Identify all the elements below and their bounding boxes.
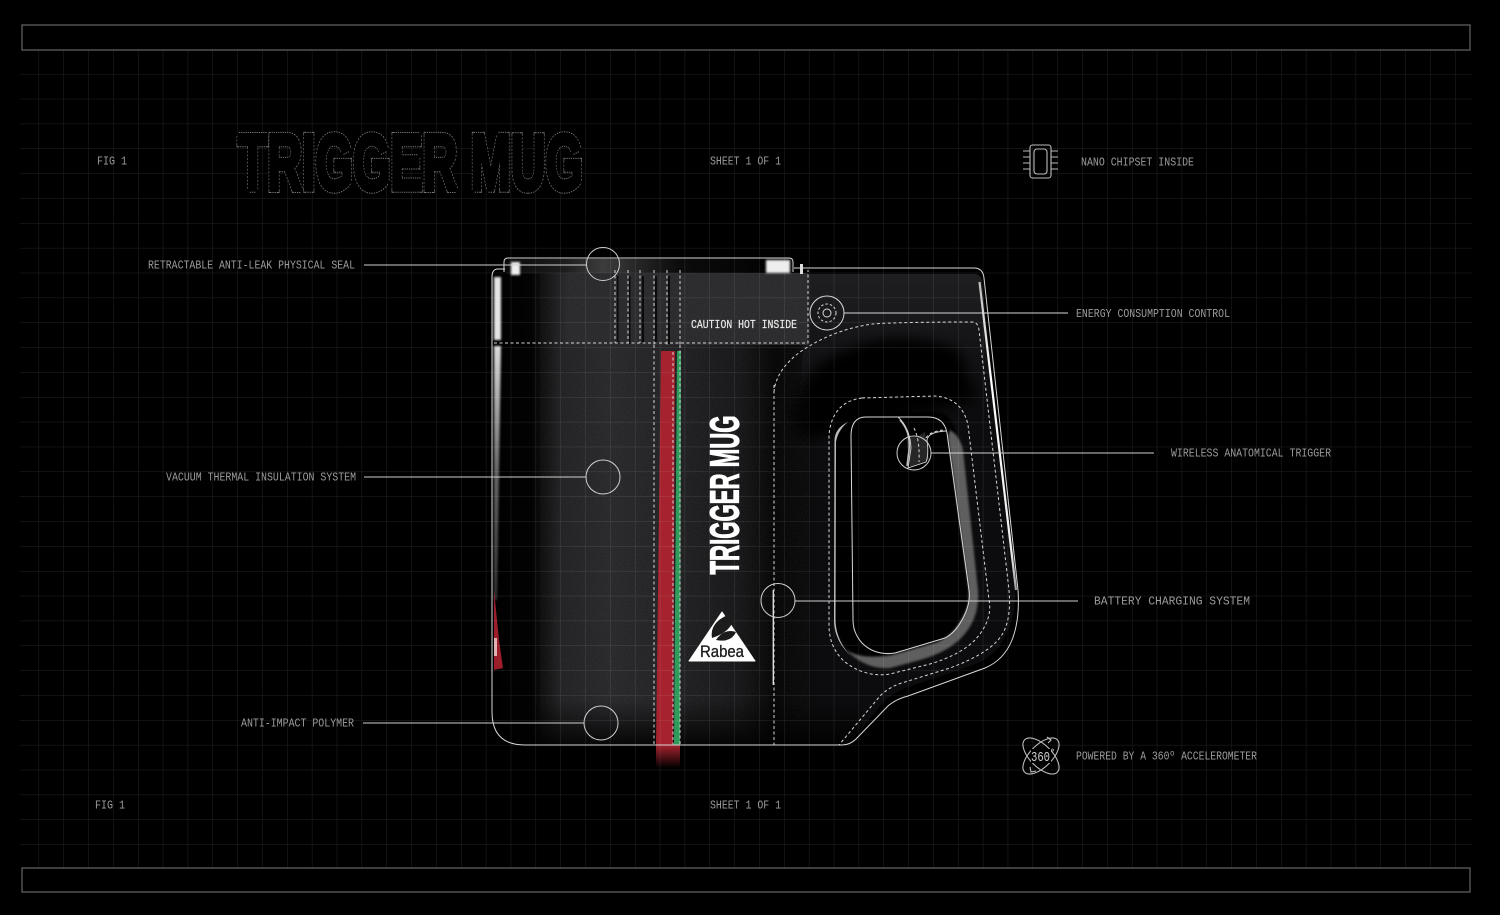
- handle inner outline: [851, 417, 969, 654]
- label: sheet bottom: SHEET 1 OF 1: [710, 798, 781, 812]
- stripe tail: [656, 745, 680, 768]
- label: fig bottom: FIG 1: [95, 798, 125, 812]
- icon: chip: [1023, 145, 1058, 178]
- handle opening: [833, 412, 975, 666]
- body outline: [492, 268, 1018, 745]
- opening dash: [829, 396, 990, 675]
- mug body fill: [492, 274, 1015, 745]
- top band: [492, 273, 808, 345]
- left rim highlight: [834, 422, 850, 655]
- stitched dashed lines: [494, 270, 1010, 745]
- icon: 360: 360: [1031, 751, 1050, 766]
- surface noise: [540, 274, 808, 745]
- top frame: [22, 25, 1470, 50]
- callout: polymer: [363, 706, 618, 740]
- shoulder shadow: [790, 339, 975, 440]
- handle rim highlight: [846, 430, 978, 668]
- callout: trigger: [897, 436, 1154, 470]
- callout: battery: [761, 584, 1078, 618]
- top right shoulder: [800, 274, 993, 395]
- stripe dashes: [654, 345, 680, 745]
- trigger dash: [914, 428, 945, 462]
- body dash: [773, 385, 775, 745]
- body solid highlight: [773, 590, 774, 685]
- lid outline: [504, 258, 793, 272]
- bottom frame: [22, 868, 1470, 892]
- mug photo: [492, 259, 1016, 768]
- label: insulation: VACUUM THERMAL INSULATION SYSTEM: [166, 470, 356, 484]
- callout: energy: [810, 296, 1068, 330]
- top band dashes: [494, 270, 808, 343]
- trigger outline: [898, 417, 946, 468]
- label: seal: RETRACTABLE ANTI-LEAK PHYSICAL SEAL: [148, 258, 355, 272]
- callout: seal: [364, 248, 620, 280]
- label: chipset: NANO CHIPSET INSIDE: [1081, 156, 1194, 170]
- mug outlines: [492, 258, 1018, 745]
- caution text: CAUTION HOT INSIDE: [691, 319, 797, 332]
- label: fig top: FIG 1: [97, 154, 127, 168]
- leaves: [712, 613, 736, 641]
- left body highlights: [494, 277, 503, 670]
- callout: insulation: [364, 460, 620, 494]
- grip dashes: [615, 270, 680, 345]
- bottom shadow: [492, 700, 862, 746]
- title: outlined dashed: TRIGGER MUG: [238, 118, 583, 206]
- title: outlined dashed: TRIGGER MUG: [238, 118, 583, 206]
- icon: 360: [1017, 732, 1065, 780]
- lid highlights: [511, 260, 803, 275]
- label: sheet top: SHEET 1 OF 1: [710, 154, 781, 168]
- lid slit: [505, 259, 793, 273]
- label: energy: ENERGY CONSUMPTION CONTROL: [1076, 307, 1230, 321]
- logo: Rabea: [689, 612, 755, 661]
- label: trigger: WIRELESS ANATOMICAL TRIGGER: [1171, 446, 1331, 460]
- title: outlined dashed: [238, 118, 583, 206]
- trigger highlight: [900, 420, 929, 467]
- red stripe: [656, 351, 675, 745]
- large handle dash: [774, 322, 1010, 745]
- green stripe: [674, 351, 681, 745]
- label: accelerometer: POWERED BY A 360º ACCELEROMETER: [1076, 750, 1257, 764]
- logo text: Rabea: [700, 642, 744, 661]
- label: battery: BATTERY CHARGING SYSTEM: [1094, 594, 1250, 608]
- handle right highlight: [980, 282, 1016, 590]
- label: polymer: ANTI-IMPACT POLYMER: [241, 716, 354, 730]
- grip ridges: [617, 276, 670, 344]
- product name: TRIGGER MUG: [702, 416, 748, 574]
